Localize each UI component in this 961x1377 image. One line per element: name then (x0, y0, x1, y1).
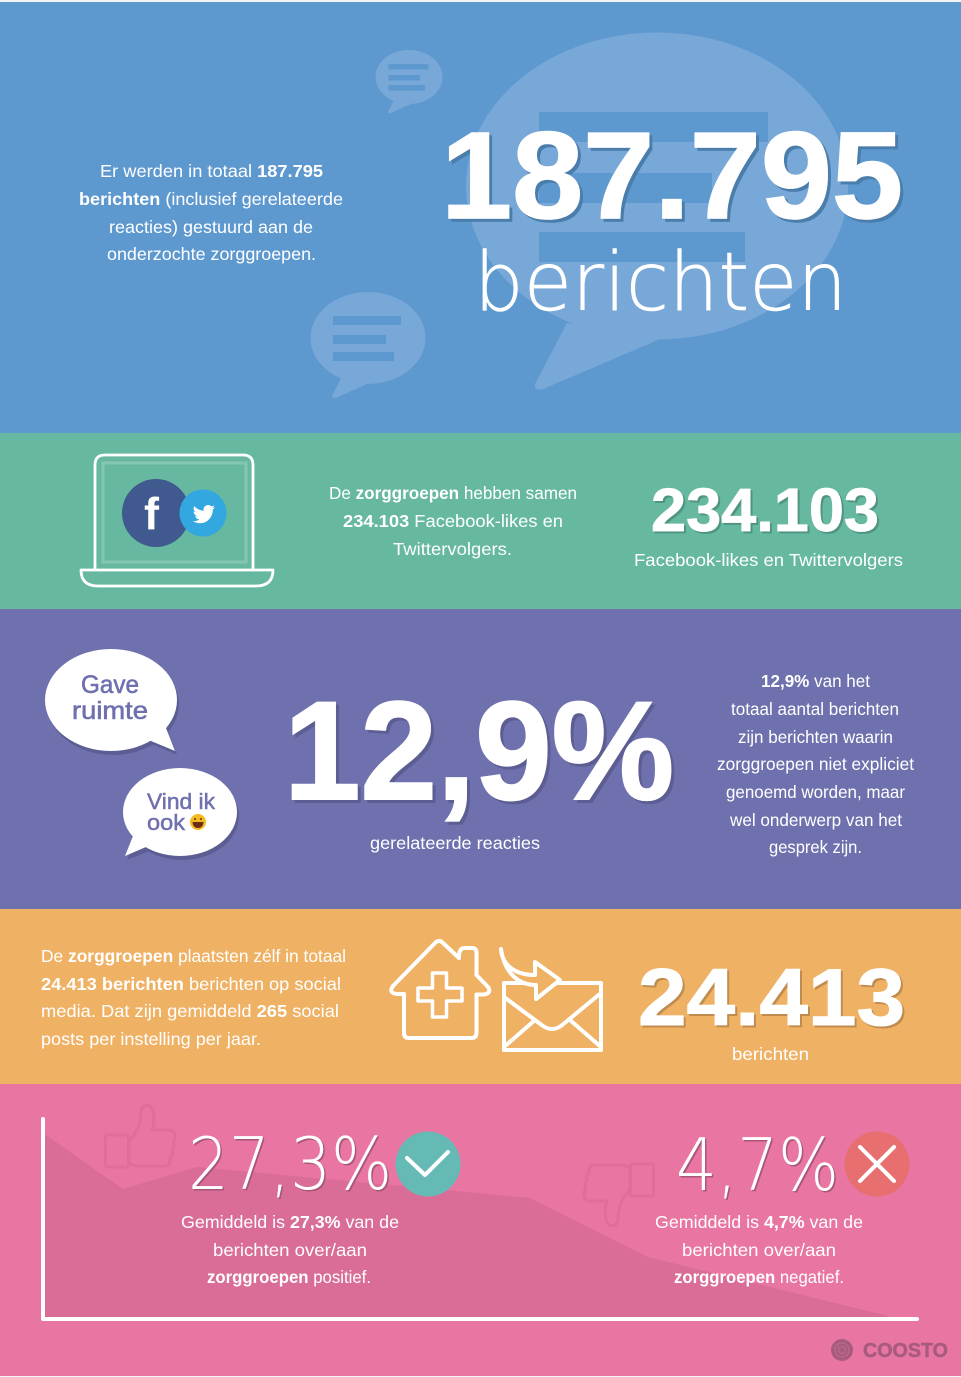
icon: small speech bubble top (376, 50, 442, 113)
panel: followers (0, 433, 961, 609)
icon: care home (391, 941, 489, 1038)
big number: 24.413: 24.413 (638, 953, 905, 1043)
icon: speech bubble Gave ruimte: Gave (81, 671, 139, 699)
big label: berichten: berichten (474, 236, 847, 330)
text: related reactions description: zorggroepen niet expliciet (717, 754, 914, 774)
logo: Coosto (831, 1339, 948, 1362)
icon: speech bubble Gave ruimte: ruimte (72, 697, 148, 725)
icon: speech bubble Vind ik ook: ook (147, 810, 186, 835)
text: related reactions description (717, 671, 914, 857)
icon: large speech bubble (466, 32, 848, 390)
big number: 12,9%: 12,9% (284, 672, 674, 829)
text: own posts description: 24.413 berichten berichten op social (41, 974, 341, 994)
text: related reactions description: gesprek zijn. (769, 837, 862, 857)
text: negative description: zorggroepen negatief. (674, 1267, 844, 1287)
icon: thumb up (106, 1105, 175, 1167)
text: total intro (79, 161, 343, 264)
text: negative description (655, 1212, 863, 1287)
text: own posts description: posts per instelling per jaar. (41, 1029, 261, 1049)
text: followers description: De zorggroepen hebben samen (329, 483, 577, 503)
panel: related reactions (0, 609, 961, 909)
icon: speech bubble Gave ruimte (45, 649, 179, 755)
label: followers: Facebook-likes en Twittervolgers (634, 550, 903, 570)
text: positive description (181, 1212, 399, 1287)
label: related reactions: gerelateerde reacties (370, 833, 540, 853)
text: negative description: Gemiddeld is 4,7% van de (655, 1212, 863, 1232)
icon: laptop with social logos: f (144, 488, 160, 540)
text: own posts description (41, 946, 346, 1049)
label: berichten: berichten (732, 1044, 809, 1064)
text: own posts description: media. Dat zijn gemiddeld 265 social (41, 1001, 339, 1021)
icon: check badge (396, 1132, 460, 1196)
text: related reactions description: totaal aantal berichten (731, 699, 899, 719)
big number: 27,3%: 27,3% (188, 1122, 392, 1206)
text: related reactions description: zijn berichten waarin (738, 727, 893, 747)
icon: envelope with arrow (501, 949, 601, 1050)
text: related reactions description: genoemd worden, maar (726, 782, 905, 802)
text: related reactions description: 12,9% van het (761, 671, 870, 691)
chart: sentiment area (43, 1119, 917, 1319)
icon: medium speech bubble bottom (310, 292, 426, 398)
text: followers description (329, 483, 577, 559)
big number: 187.795: 187.795 (441, 108, 903, 245)
panel: sentiment (0, 1084, 961, 1376)
text: total intro: Er werden in totaal 187.795 (100, 161, 323, 181)
icon: speech bubble Vind ik ook: Vind ik (147, 789, 216, 814)
big number: 234.103: 234.103 (651, 476, 879, 544)
text: total intro: berichten (inclusief gerelateerde (79, 189, 343, 209)
text: positive description: berichten over/aan (213, 1240, 367, 1260)
icon: thumb down (584, 1164, 654, 1226)
text: positive description: zorggroepen positief. (207, 1267, 371, 1287)
text: followers description: 234.103 Facebook-likes en (343, 511, 563, 531)
text: positive description: Gemiddeld is 27,3% van de (181, 1212, 399, 1232)
icon: speech bubble Vind ik ook (123, 768, 239, 860)
text: total intro: onderzochte zorggroepen. (107, 244, 316, 264)
text: negative description: berichten over/aan (682, 1240, 836, 1260)
text: followers description: Twittervolgers. (393, 539, 512, 559)
text: related reactions description: wel onderwerp van het (729, 810, 902, 830)
panel: total messages (0, 2, 961, 433)
big number: 4,7%: 4,7% (676, 1123, 839, 1207)
icon: laughing emoji (190, 814, 206, 830)
logo: Coosto: COOSTO (863, 1340, 948, 1362)
text: total intro: reacties) gestuurd aan de (109, 217, 313, 237)
icon: laptop with social logos (81, 455, 273, 586)
icon: cross badge (844, 1132, 910, 1196)
text: own posts description: De zorggroepen plaatsten zélf in totaal (41, 946, 346, 966)
panel: own posts (0, 909, 961, 1084)
